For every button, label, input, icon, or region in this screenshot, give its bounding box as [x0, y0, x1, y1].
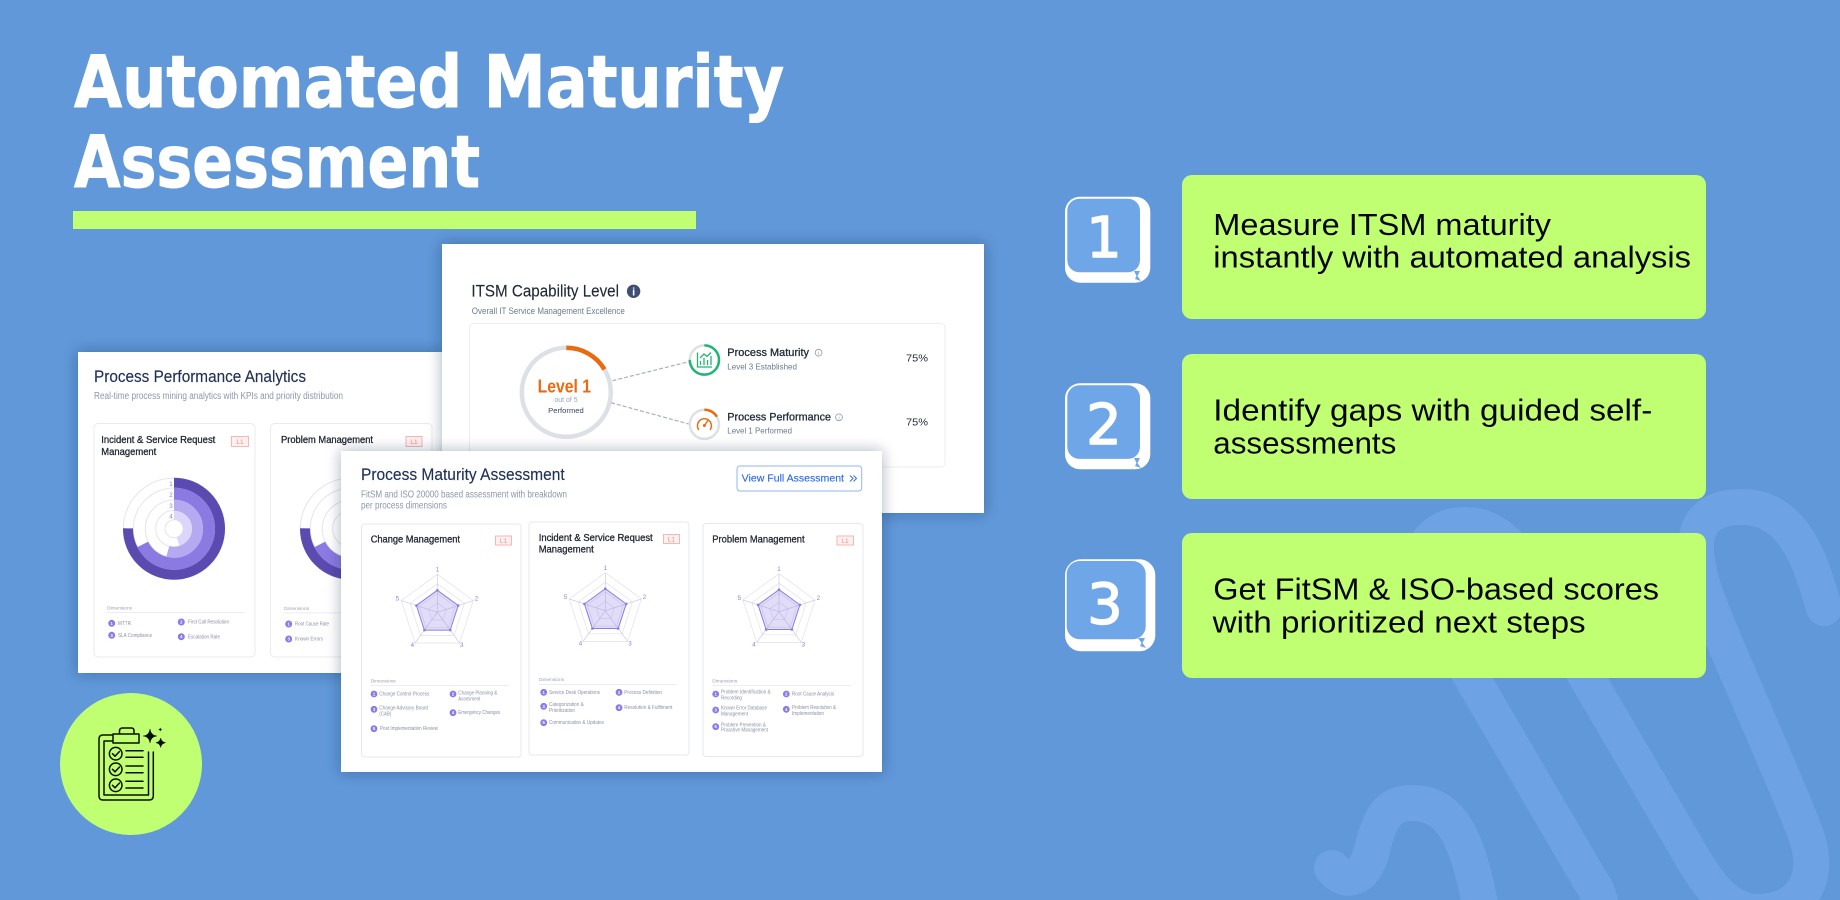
- process performance text: 75%: [906, 417, 928, 429]
- title: Automated Maturity: [74, 40, 784, 124]
- card: incident and service request maturity: Service Desk Operations: [549, 690, 600, 696]
- process performance text: Process Performance: [727, 411, 831, 423]
- card: incident and service request maturity: Management: [539, 545, 594, 556]
- card: problem management maturity: Implementation: [792, 711, 824, 717]
- card: change management: 3: [373, 707, 376, 712]
- card: incident and service request maturity: 1: [543, 690, 546, 695]
- card: problem management maturity: Root Cause Analysis: [792, 692, 834, 698]
- step 3 number key: 3: [1087, 572, 1123, 637]
- card: incident and service request maturity: Communication & Updates: [549, 720, 604, 726]
- panel heading: ITSM Capability Level: [471, 282, 619, 301]
- icon: info: i: [632, 286, 635, 298]
- card: incident and service request maturity: 5: [543, 720, 546, 725]
- card: change management: 2: [475, 596, 479, 602]
- card: incident and service request maturity: Prioritization: [549, 708, 575, 714]
- icon: process maturity: [690, 345, 719, 375]
- card: problem management: 3: [288, 636, 291, 642]
- card: incident and service request maturity: L1: [668, 536, 675, 544]
- panel background: [442, 244, 984, 513]
- card: problem management: Problem Management: [281, 435, 373, 446]
- process maturity text: 75%: [906, 352, 928, 364]
- panel subtitle: [361, 490, 567, 512]
- card: problem management: 1: [288, 622, 291, 626]
- card: problem management: L1: [410, 439, 418, 446]
- card: incident and service request maturity: Incident & Service Request: [539, 533, 653, 544]
- panel heading: Process Maturity Assessment: [361, 466, 565, 484]
- step 3 card: with prioritized next steps: [1212, 605, 1586, 639]
- card: incident and service request: SLA Compliance: [118, 633, 152, 639]
- button: view full assessment: View Full Assessment: [742, 474, 844, 485]
- card: incident and service request: First Call Resolution: [188, 620, 229, 626]
- button: view full assessment: [737, 466, 862, 491]
- step 2 number key: 2: [1086, 393, 1122, 458]
- card: change management: (CAB): [379, 712, 392, 718]
- card: change management: L1: [500, 538, 507, 545]
- card: problem management maturity: Problem Prevention &: [721, 723, 767, 729]
- card: problem management maturity: 5: [715, 724, 718, 729]
- gauge: level 1: Level 1: [538, 376, 591, 396]
- card: change management: 4: [411, 642, 415, 649]
- panel subtitle: per process dimensions: [361, 501, 447, 512]
- card: incident and service request: 2: [180, 620, 183, 624]
- panel subtitle: Real-time process mining analytics with KPIs and priority distribution: [94, 391, 343, 402]
- card: change management: [362, 524, 521, 757]
- card: incident and service request maturity: 4: [618, 705, 621, 710]
- card: problem management maturity: Recording: [721, 695, 742, 701]
- gauge: level 1: [522, 348, 611, 437]
- card: change management: Assesment: [458, 696, 481, 702]
- card: problem management maturity: 1: [777, 566, 781, 573]
- card: incident and service request maturity: 4: [579, 640, 583, 648]
- process maturity text: i: [818, 351, 819, 357]
- card: incident and service request: Management: [101, 447, 157, 458]
- inner card: [470, 324, 945, 467]
- card: change management: Post Implementation Review: [380, 726, 438, 732]
- card: problem management maturity: Problem Identification &: [721, 690, 771, 696]
- card: incident and service request maturity: 3: [628, 640, 632, 648]
- connector: maturity: [612, 362, 689, 381]
- panel background: [341, 451, 882, 772]
- card: incident and service request maturity: 1: [604, 565, 608, 572]
- step 3 card: [1182, 533, 1706, 678]
- process performance text: [727, 411, 928, 436]
- card: incident and service request: 4: [180, 634, 183, 639]
- card: problem management maturity: 3: [802, 642, 806, 648]
- card: incident and service request maturity: Resolution & Fulfilment: [624, 705, 673, 711]
- step 1 card: Measure ITSM maturity: [1213, 208, 1552, 242]
- card: incident and service request: 1: [111, 621, 114, 626]
- card: incident and service request: Incident & Service Request: [101, 435, 216, 446]
- card: incident and service request: Dimensions: [107, 606, 133, 612]
- card: problem management: Root Cause Rate: [295, 622, 329, 628]
- step 2 card: assessments: [1213, 426, 1396, 460]
- card: change management: Emergency Changes: [458, 710, 501, 716]
- title: [74, 40, 784, 204]
- step 3 card: Get FitSM & ISO-based scores: [1213, 572, 1659, 606]
- card: problem management maturity: 2: [785, 692, 788, 696]
- panel subtitle: FitSM and ISO 20000 based assessment with breakdown: [361, 490, 567, 501]
- panel: process maturity assessment: [341, 451, 882, 772]
- card: problem management maturity: Management: [721, 712, 749, 718]
- card: change management: Dimensions: [371, 679, 396, 685]
- card: incident and service request maturity: Categorization &: [549, 702, 584, 708]
- panel: ITSM capability level: [442, 244, 984, 513]
- card: problem management maturity: Problem Resolution &: [792, 705, 837, 711]
- card: incident and service request maturity: 2: [618, 690, 621, 695]
- card: problem management maturity: Known Error Database: [721, 706, 767, 712]
- card: problem management maturity: 1: [715, 692, 718, 696]
- panel: process performance analytics: [78, 352, 442, 673]
- step 1 number key: 1: [1086, 206, 1122, 271]
- card: incident and service request: Escalation Rate: [188, 634, 220, 640]
- icon: process performance: [690, 410, 719, 439]
- card: change management: 1: [436, 566, 440, 574]
- card: change management: 5: [396, 596, 400, 602]
- connector: performance: [611, 403, 689, 424]
- card: incident and service request: MTTR: [118, 621, 131, 627]
- step 1 number key: [1065, 197, 1150, 283]
- card: change management: 5: [373, 726, 376, 731]
- title underline: [73, 211, 696, 229]
- card: incident and service request maturity: 2: [643, 594, 647, 601]
- step 2 number key: [1065, 383, 1150, 469]
- panel heading: Process Performance Analytics: [94, 368, 306, 386]
- icon: info: [627, 285, 640, 298]
- card: problem management maturity: Dimensions: [712, 678, 738, 684]
- card: incident and service request: 3: [111, 633, 114, 638]
- card: incident and service request: [94, 424, 255, 657]
- step 3 number key: [1065, 559, 1155, 651]
- card: incident and service request maturity: 3: [543, 704, 546, 709]
- card: change management: Change Planning &: [458, 690, 498, 696]
- card: problem management maturity: 4: [752, 642, 756, 648]
- gauge: level 1: Performed: [548, 406, 584, 415]
- icon: clipboard checklist: [60, 693, 202, 835]
- card: change management: 4: [452, 710, 455, 715]
- card: problem management maturity: L1: [841, 538, 849, 545]
- step 1 card: [1182, 175, 1706, 319]
- card: incident and service request: L1: [236, 439, 244, 446]
- card: change management: 1: [373, 692, 376, 696]
- card: problem management: Dimensions: [284, 606, 310, 612]
- card: problem management: Known Errors: [295, 636, 323, 642]
- process maturity text: Process Maturity: [727, 347, 809, 359]
- card: incident and service request: 3: [169, 503, 173, 510]
- step 2 card: [1182, 354, 1706, 499]
- card: incident and service request: 2: [169, 492, 173, 499]
- title: Assessment: [74, 120, 480, 204]
- step 2 card: Identify gaps with guided self-: [1213, 394, 1652, 428]
- card: incident and service request maturity: Process Definition: [624, 690, 662, 696]
- card: incident and service request maturity: 5: [564, 594, 568, 601]
- card: problem management maturity: 4: [785, 707, 788, 712]
- process maturity text: Level 3 Established: [727, 362, 797, 371]
- decorative squiggle: [1332, 507, 1824, 900]
- card: change management: 2: [452, 692, 455, 696]
- card: incident and service request: 1: [169, 481, 173, 488]
- card: problem management maturity: Proactive Management: [721, 728, 769, 734]
- card: incident and service request: 4: [169, 514, 173, 520]
- card: change management: 3: [460, 642, 464, 649]
- card: incident and service request maturity: Dimensions: [539, 677, 565, 683]
- card: problem management maturity: 5: [738, 595, 742, 602]
- card: problem management maturity: 2: [817, 595, 821, 602]
- card: change management: Change Control Process: [379, 692, 430, 698]
- card: problem management: [270, 424, 432, 657]
- card: problem management maturity: [703, 524, 863, 756]
- step 1 card: instantly with automated analysis: [1213, 241, 1691, 275]
- gauge: level 1: out of 5: [554, 397, 578, 404]
- card: incident and service request maturity: [529, 522, 689, 755]
- card: change management: Change Advisory Board: [379, 706, 428, 712]
- process performance text: Level 1 Performed: [727, 427, 792, 436]
- panel background: [78, 352, 442, 673]
- process performance text: i: [838, 415, 840, 421]
- card: problem management maturity: 3: [715, 708, 718, 712]
- panel subtitle: Overall IT Service Management Excellence: [472, 306, 625, 316]
- card: change management: Change Management: [371, 535, 460, 546]
- card: problem management maturity: Problem Management: [712, 535, 805, 546]
- process maturity text: [727, 347, 928, 371]
